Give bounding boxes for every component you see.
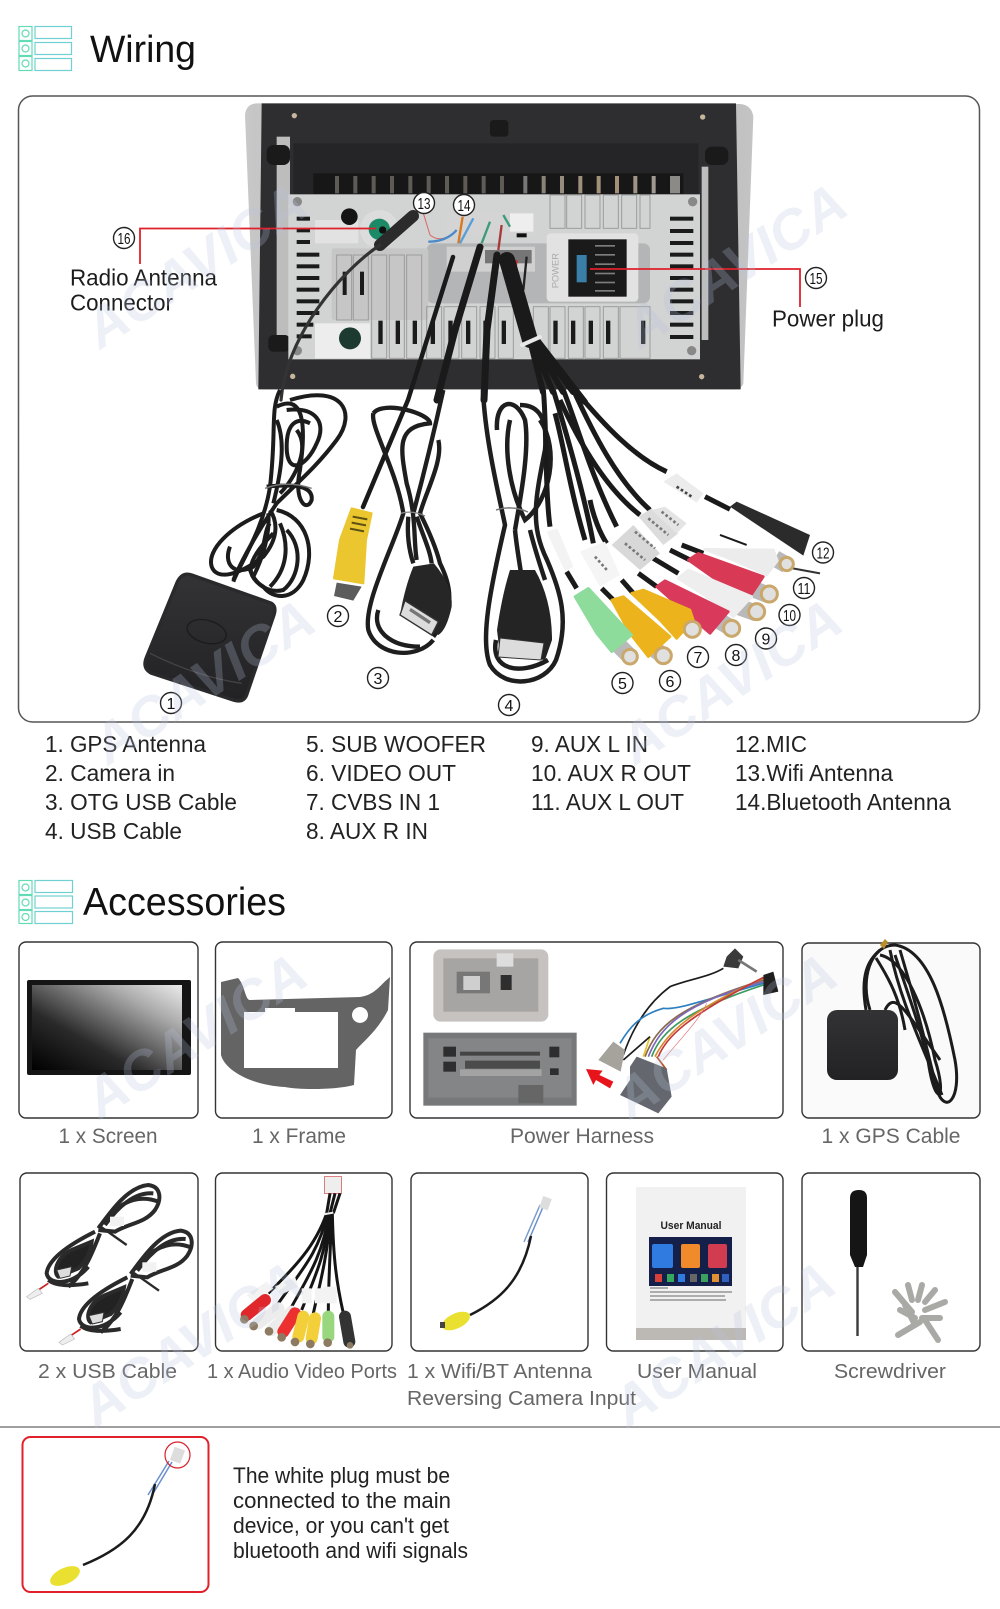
watermarks <box>67 171 858 1439</box>
numbered markers: 12 <box>816 546 830 562</box>
item: screwdriver: Screwdriver <box>834 1360 946 1383</box>
watermarks: ACAVICA <box>599 1249 846 1439</box>
numbered markers: 6 <box>666 674 675 691</box>
legend: numbered port list: 6. VIDEO OUT <box>306 760 456 786</box>
numbered markers: 13 <box>418 196 431 213</box>
item: GPS cable: 1 x GPS Cable <box>822 1125 960 1148</box>
legend: numbered port list: 13.Wifi Antenna <box>735 760 893 786</box>
connector blocks <box>447 212 535 235</box>
numbered markers: 8 <box>732 648 741 665</box>
numbered markers: 5 <box>618 676 627 693</box>
watermarks: ACAVICA <box>71 941 318 1131</box>
watermarks: ACAVICA <box>611 171 858 361</box>
text: white plug warning: bluetooth and wifi signals <box>233 1538 468 1563</box>
device rear view <box>245 103 753 389</box>
callout: white plug warning image <box>22 1437 208 1592</box>
numbered markers: 3 <box>374 671 383 688</box>
item: GPS cable <box>802 939 980 1148</box>
legend: numbered port list: 12.MIC <box>735 731 807 757</box>
legend: numbered port list: 5. SUB WOOFER <box>306 731 486 757</box>
item: frame: 1 x Frame <box>252 1125 346 1148</box>
numbered markers <box>114 192 834 716</box>
numbered markers: 1 <box>167 696 176 713</box>
audio video plugs <box>543 390 820 664</box>
callout lines <box>140 228 800 307</box>
item: screen: 1 x Screen <box>58 1125 158 1148</box>
camera plug <box>334 508 372 583</box>
legend: numbered port list: 1. GPS Antenna <box>45 731 206 757</box>
cables from device <box>281 216 585 507</box>
icon: accessories heading <box>19 880 72 924</box>
legend: numbered port list: 7. CVBS IN 1 <box>306 789 440 815</box>
device rear view: POWER <box>550 253 560 288</box>
numbered markers: 4 <box>505 698 514 715</box>
watermarks: ACAVICA <box>601 941 848 1131</box>
numbered markers: 14 <box>458 198 471 215</box>
icon: wiring heading <box>19 26 72 70</box>
USB cable 4 loop <box>483 390 563 681</box>
legend: numbered port list <box>45 731 951 844</box>
legend: numbered port list: 9. AUX L IN <box>531 731 648 757</box>
item: audio video ports <box>207 1173 397 1383</box>
item: power harness <box>410 942 783 1148</box>
item: screwdriver <box>802 1173 980 1383</box>
numbered markers: 11 <box>798 581 811 598</box>
numbered markers: 10 <box>783 608 796 625</box>
watermarks: ACAVICA <box>79 587 326 777</box>
item: USB cable: 2 x USB Cable <box>38 1360 177 1383</box>
item: power harness: Power Harness <box>510 1125 654 1148</box>
power socket <box>568 239 627 297</box>
item: user manual: User Manual <box>660 1220 722 1232</box>
callout: radio antenna connector: Connector <box>70 290 173 316</box>
panel: wiring diagram <box>18 96 980 722</box>
watermarks: ACAVICA <box>71 171 318 361</box>
heading: Accessories: Accessories <box>83 881 286 924</box>
legend: numbered port list: 2. Camera in <box>45 760 175 786</box>
heading: Wiring: Wiring <box>90 29 196 71</box>
item: user manual: User Manual <box>637 1360 757 1383</box>
item: screen <box>19 942 198 1148</box>
legend: numbered port list: 14.Bluetooth Antenna <box>735 789 951 815</box>
callout: radio antenna connector <box>70 264 217 316</box>
USB cable 3 loop <box>368 390 449 653</box>
item: wifi and BT antenna <box>407 1173 636 1410</box>
text: white plug warning: connected to the main <box>233 1488 451 1513</box>
item: wifi and BT antenna: 1 x Wifi/BT Antenna <box>407 1360 593 1383</box>
numbered markers: 7 <box>694 650 703 667</box>
numbered markers: 9 <box>762 632 771 648</box>
item: frame <box>216 942 392 1148</box>
callout: radio antenna connector: Radio Antenna <box>70 264 217 290</box>
text: white plug warning: device, or you can't get <box>233 1513 449 1538</box>
watermarks: ACAVICA <box>606 587 853 777</box>
GPS antenna and cable <box>145 390 452 701</box>
legend: numbered port list: 8. AUX R IN <box>306 818 428 844</box>
legend: numbered port list: 10. AUX R OUT <box>531 760 691 786</box>
legend: numbered port list: 4. USB Cable <box>45 818 182 844</box>
numbered markers: 16 <box>118 231 131 248</box>
text: white plug warning: The white plug must be <box>233 1463 450 1488</box>
callout: power plug: Power plug <box>772 306 884 332</box>
metal back plate <box>288 194 700 359</box>
numbered markers: 2 <box>334 609 343 626</box>
legend: numbered port list: 11. AUX L OUT <box>531 789 684 815</box>
watermarks: ACAVICA <box>67 1249 314 1439</box>
cable tags <box>547 473 703 587</box>
item: user manual <box>606 1173 783 1383</box>
RCA plugs <box>615 558 787 657</box>
item: wifi and BT antenna: Reversing Camera Input <box>407 1387 636 1410</box>
item: USB cable <box>20 1173 198 1383</box>
item: audio video ports: 1 x Audio Video Ports <box>207 1360 397 1383</box>
text: white plug warning <box>233 1463 468 1563</box>
legend: numbered port list: 3. OTG USB Cable <box>45 789 237 815</box>
numbered markers: 15 <box>810 271 823 288</box>
